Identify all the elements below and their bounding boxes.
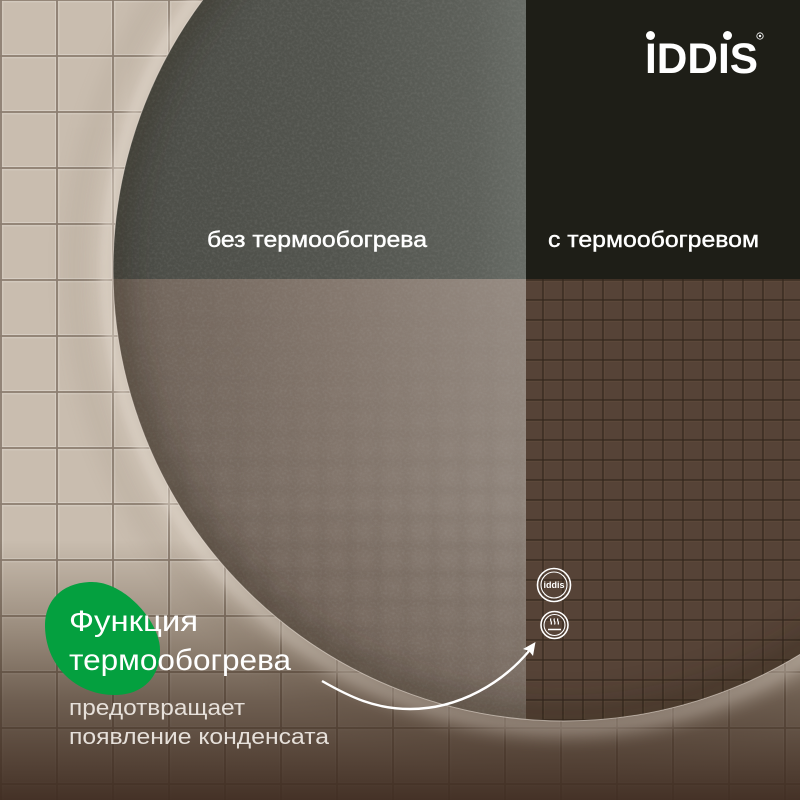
text block: prevents condensation: появление конденсата (69, 724, 330, 749)
arrow: from caption to heating button (322, 642, 536, 709)
text block: prevents condensation: предотвращает (69, 695, 245, 720)
mirror quadrant: heated, dark upper (526, 0, 800, 279)
icon: iddis touch button (538, 568, 570, 602)
round mirror (100, 0, 800, 730)
mirror quadrant: misted, no heating, lower (100, 279, 526, 730)
heading: heating function (69, 605, 291, 677)
logo: iddis: IDDIS (645, 35, 758, 83)
heading: heating function: термообогрева (69, 644, 291, 677)
text block: prevents condensation (69, 695, 330, 749)
icon: iddis touch button: iddis (543, 580, 565, 590)
label: with heating: с термообогревом (548, 227, 759, 252)
mirror quadrant: misted, no heating, upper (100, 0, 526, 279)
heading: heating function: Функция (69, 605, 198, 638)
mirror quadrant: heated, clear mosaic (526, 279, 800, 729)
icon: heating touch button (541, 612, 568, 638)
label: without heating: без термообогрева (207, 227, 428, 252)
green blob accent (45, 582, 160, 695)
